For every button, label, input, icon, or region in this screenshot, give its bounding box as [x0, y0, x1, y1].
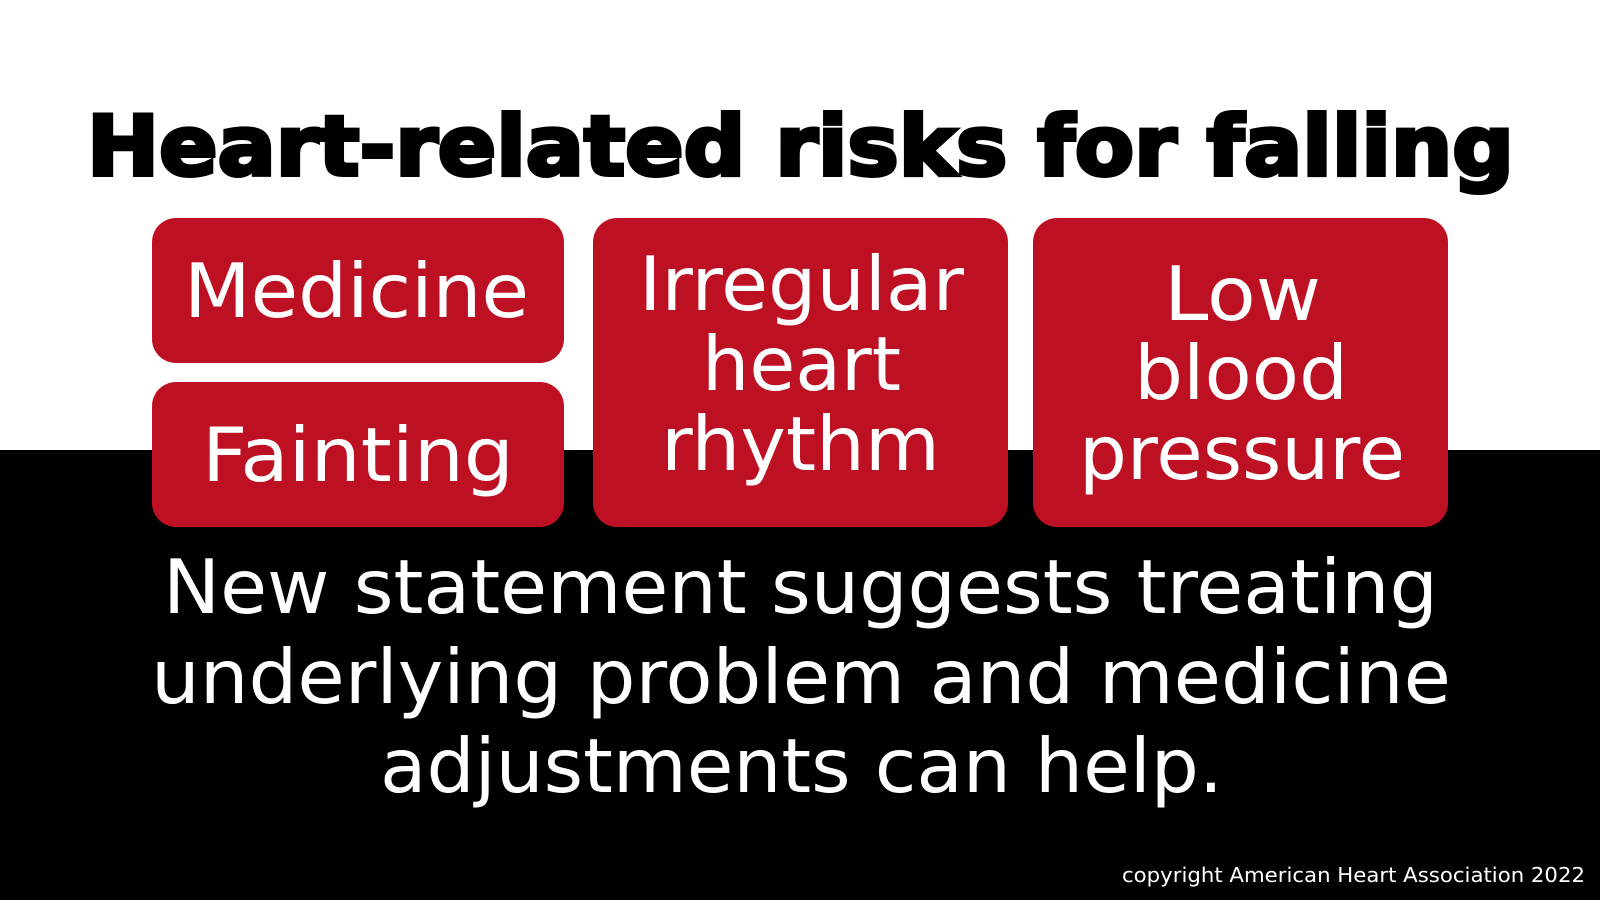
box: low blood pressure: blood [1134, 329, 1348, 417]
box: fainting: Fainting [202, 411, 514, 499]
text block: statement summary: adjustments can help. [380, 722, 1223, 810]
text block: statement summary: New statement suggests treating [163, 543, 1438, 631]
box: irregular heart rhythm [593, 218, 1008, 527]
box: medicine [152, 218, 564, 363]
copyright note: copyright American Heart Association 2022 [1122, 863, 1585, 887]
box: fainting [152, 382, 564, 527]
box: medicine: Medicine [184, 247, 529, 335]
text block: statement summary [151, 543, 1451, 810]
box: low blood pressure: pressure [1079, 409, 1405, 497]
box: low blood pressure: Low [1164, 250, 1321, 338]
box: irregular heart rhythm: rhythm [661, 400, 940, 488]
box: irregular heart rhythm: heart [702, 320, 901, 408]
box: irregular heart rhythm: Irregular [639, 240, 964, 328]
box: low blood pressure [1033, 218, 1448, 527]
panel: risk factor boxes [152, 218, 1448, 527]
title: Heart-related risks for falling [87, 98, 1514, 195]
text block: statement summary: underlying problem and medicine [151, 633, 1451, 721]
